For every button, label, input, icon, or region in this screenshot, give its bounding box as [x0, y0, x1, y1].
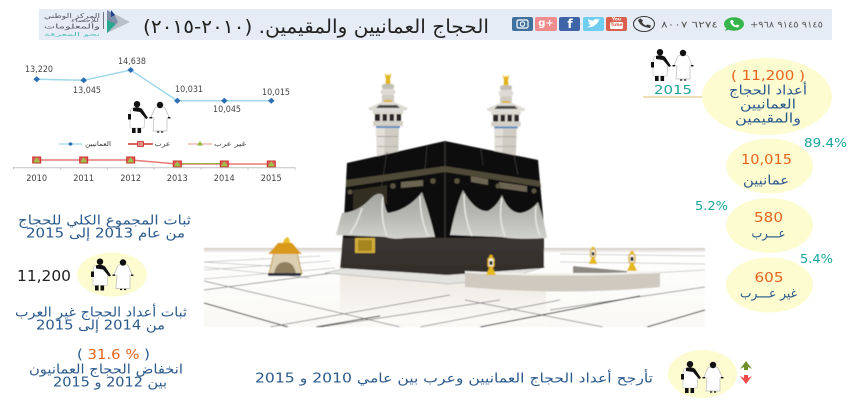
- right drape: [450, 190, 547, 239]
- panel: 2015 total: [643, 49, 832, 135]
- axis: 2012: [120, 174, 141, 184]
- total with icon: 11,200: [17, 267, 71, 285]
- logo: للإحصاء: [71, 18, 100, 24]
- series: Arabs and non-Arabs: [33, 157, 275, 167]
- stat: non-Arabs: غير عـــرب: [740, 286, 797, 302]
- whatsapp number: +٩٦٨ ٩١٤٥ ٩١٤٥: [750, 20, 823, 30]
- panel: 2015 total: أعداد الحجاج: [729, 82, 807, 98]
- text: Omani decline: بين 2012 و 2015: [53, 376, 167, 390]
- stat: Omanis: عمانيين: [743, 174, 789, 188]
- text: non-Arab stability: من 2014 إلى 2015: [36, 318, 165, 334]
- stat: Arabs: 580: [754, 210, 783, 226]
- icon: youtube: You: [611, 16, 621, 22]
- logo: والمعلومات: [44, 22, 100, 30]
- stat: Omanis: 89.4%: [804, 136, 847, 150]
- base: [340, 234, 544, 275]
- door: [355, 238, 375, 253]
- stat: Arabs: [695, 198, 813, 253]
- icon: google plus: g+: [538, 18, 554, 29]
- series: Omanis: 10,015: [262, 88, 290, 98]
- year label: 2015: [654, 83, 692, 97]
- stat: non-Arabs: 5.4%: [800, 252, 833, 266]
- logo: نحو المعرفة: [44, 32, 100, 38]
- icon: youtube: Tube: [610, 22, 623, 28]
- text: Omani decline: انخفاض الحجاج العمانيون: [29, 362, 183, 378]
- Kaaba: [336, 141, 547, 275]
- text: non-Arab stability: [15, 304, 187, 334]
- stat: non-Arabs: [726, 252, 833, 312]
- logo: المركز الوطني: [44, 12, 100, 20]
- legend: غير عرب: [214, 140, 247, 148]
- series: Omanis: 10,031: [175, 85, 203, 95]
- header bar: [39, 9, 832, 40]
- arrow: down: [740, 375, 752, 384]
- stat: Omanis: 10,015: [741, 152, 792, 168]
- icon: google plus: [535, 17, 557, 31]
- phone number: ٨٠٠٧ ٦٢٧٤: [661, 20, 718, 30]
- lantern: Maqam Ibrahim: [268, 237, 302, 276]
- line chart: [13, 57, 295, 184]
- illustration: Kaaba scene: [204, 73, 705, 327]
- text: Omani decline: [29, 348, 183, 390]
- text: Omani decline: ( 31.6 % ): [77, 348, 150, 362]
- text: total stability: [18, 214, 191, 242]
- icon: twitter: [583, 17, 604, 31]
- axis: 2015: [261, 174, 282, 184]
- plinth: [325, 267, 545, 284]
- title: الحجاج العمانيين والمقيمين. (٢٠١٠-٢٠١٥): [143, 16, 489, 38]
- icon: facebook: f: [567, 17, 573, 31]
- total with icon: [17, 252, 147, 296]
- icon: whatsapp: [724, 17, 744, 31]
- icon: pilgrims: [128, 101, 170, 133]
- stat: Omanis: [726, 136, 847, 194]
- stat: Arabs: 5.2%: [695, 199, 728, 213]
- panel: 2015 total: والمقيمين: [735, 112, 801, 126]
- text: non-Arab stability: ثبات أعداد الحجاج غير العرب: [15, 304, 187, 320]
- legend: عرب: [154, 140, 171, 148]
- bottom note: [255, 350, 752, 398]
- text: total stability: ثبات المجموع الكلي للحجاج: [18, 214, 191, 228]
- icon: instagram: [512, 17, 533, 31]
- axis: 2013: [167, 174, 188, 184]
- icon: pilgrims: [651, 49, 693, 81]
- stat: non-Arabs: 605: [754, 270, 784, 286]
- lamps: [486, 247, 637, 275]
- axis: 2014: [214, 174, 235, 184]
- door curtain: [353, 185, 387, 211]
- floor: [204, 248, 705, 327]
- text: total stability: من عام 2013 إلى 2015: [26, 226, 185, 242]
- icon: youtube: [606, 16, 627, 31]
- minarets: [368, 73, 526, 160]
- arrow: up: [740, 361, 752, 370]
- logo: [44, 10, 130, 38]
- legend: العمانيين: [85, 140, 111, 148]
- panel: 2015 total: ( 11,200 ): [731, 68, 805, 84]
- icon: facebook: [559, 17, 580, 31]
- panel: 2015 total: العمانيين: [740, 98, 796, 112]
- legend: [59, 140, 247, 148]
- icon: phone: [634, 16, 654, 32]
- series: Omanis: 13,220: [25, 65, 53, 75]
- Hijr Ismail wall: [465, 266, 660, 292]
- black cloth: [343, 141, 545, 238]
- series: Omanis: 14,638: [118, 57, 146, 67]
- axis: 2010: [26, 174, 47, 184]
- stat: Arabs: عـــرب: [752, 226, 786, 242]
- series: Omanis: [25, 57, 290, 115]
- axis: 2011: [73, 174, 94, 184]
- bottom note: تأرجح أعداد الحجاج العمانيين وعرب بين عامي 2010 و 2015: [255, 368, 653, 386]
- axis: [13, 167, 295, 184]
- series: Omanis: 10,045: [213, 105, 241, 115]
- left drape: [336, 192, 435, 239]
- series: Omanis: 13,045: [73, 86, 101, 96]
- gold belt: [346, 166, 541, 187]
